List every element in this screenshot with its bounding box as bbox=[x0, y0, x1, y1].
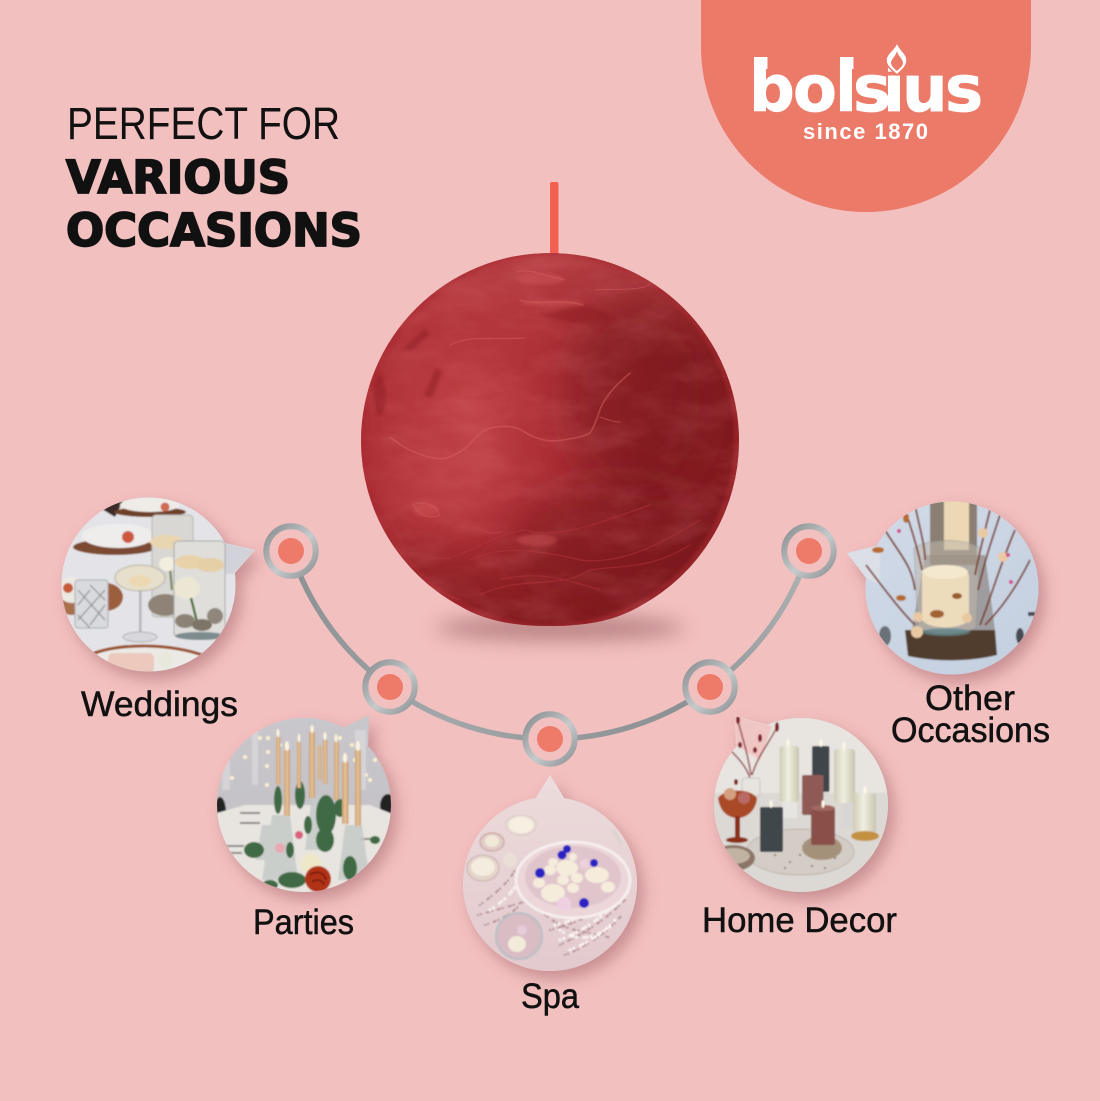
logo flame icon bbox=[886, 42, 907, 75]
title: VARIOUS bbox=[66, 151, 290, 204]
node: parties bbox=[365, 662, 415, 712]
candle sphere bbox=[355, 182, 745, 640]
title: OCCASIONS bbox=[66, 204, 362, 257]
node: home decor bbox=[685, 662, 735, 712]
candle wick bbox=[550, 182, 558, 260]
logo badge bbox=[701, 0, 1031, 212]
photo bubble: spa bbox=[455, 770, 645, 980]
title bbox=[66, 98, 362, 257]
node: spa bbox=[525, 714, 575, 764]
label: other occasions: Occasions bbox=[891, 711, 1050, 750]
logo tagline: since 1870 bbox=[803, 119, 928, 144]
label: spa: Spa bbox=[521, 977, 579, 1016]
candle shadow bbox=[435, 616, 685, 640]
node: weddings bbox=[266, 526, 316, 576]
label: home decor: Home Decor bbox=[702, 901, 897, 940]
node: other occasions bbox=[784, 526, 834, 576]
label: parties: Parties bbox=[253, 903, 354, 942]
photo bubble: parties bbox=[210, 710, 400, 900]
logo wordmark: bolsius bbox=[749, 53, 983, 127]
label: weddings: Weddings bbox=[81, 685, 238, 724]
photo bubble: other occasions bbox=[840, 495, 1050, 685]
label: other occasions bbox=[891, 679, 1050, 750]
label: other occasions: Other bbox=[925, 679, 1015, 718]
photo bubble: home decor bbox=[705, 710, 895, 903]
candle body bbox=[355, 250, 745, 630]
connector arc bbox=[291, 551, 809, 739]
title: PERFECT FOR bbox=[67, 98, 340, 149]
photo bubble: weddings bbox=[55, 490, 260, 680]
